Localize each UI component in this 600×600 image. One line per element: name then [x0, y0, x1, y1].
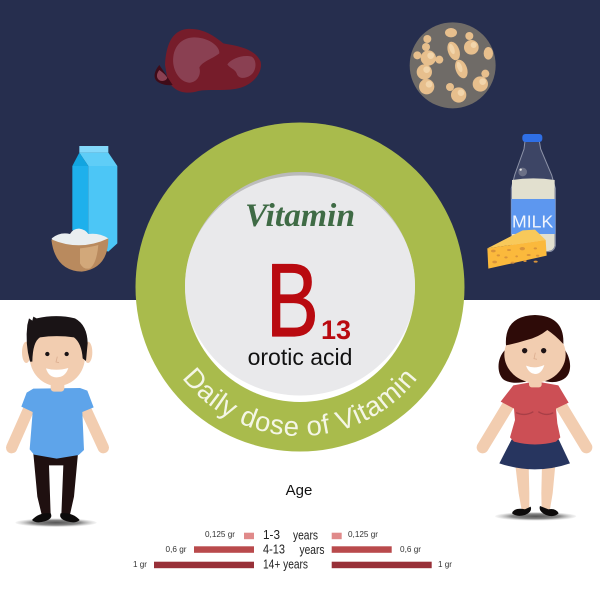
row: 1-3 years: years [293, 528, 318, 542]
row: 14+ years: 14+ years [263, 558, 308, 572]
dosage chart [133, 528, 452, 572]
milk label text: MILK [512, 212, 553, 232]
heading: Vitamin: Vitamin [245, 198, 355, 234]
row: 1-3 years: 0,125 gr [348, 529, 378, 539]
row: 4-13 years: 4-13 [263, 542, 285, 556]
row: 14+ years [133, 558, 452, 572]
row: 4-13 years [166, 542, 421, 557]
row: 4-13 years: 0,6 gr [166, 544, 187, 554]
inner disc [185, 172, 415, 402]
icon: milk carton and cottage cheese bowl [51, 146, 117, 272]
subscript 13: 13 [321, 315, 351, 345]
cheese wedge [487, 230, 547, 269]
row: 4-13 years: 0,6 gr [400, 544, 421, 554]
letter B: B [266, 241, 319, 359]
man figure [12, 316, 103, 527]
green ring [136, 122, 464, 452]
age heading: Age [286, 482, 312, 499]
row: 1-3 years [205, 528, 378, 542]
icon: liver [155, 29, 261, 93]
icon: yeast cells [410, 22, 496, 108]
row: 1-3 years: 0,125 gr [205, 529, 235, 539]
row: 1-3 years: 1-3 [263, 528, 280, 542]
icon: milk bottle and cheese [487, 134, 555, 269]
row: 14+ years: 1 gr [438, 559, 452, 569]
vitamin name: orotic acid [248, 344, 352, 370]
woman figure [483, 315, 586, 521]
curved ring label: Daily dose of Vitamin [183, 367, 417, 436]
navy background panel [0, 0, 600, 300]
row: 4-13 years: years [300, 543, 324, 557]
row: 14+ years: 1 gr [133, 559, 147, 569]
